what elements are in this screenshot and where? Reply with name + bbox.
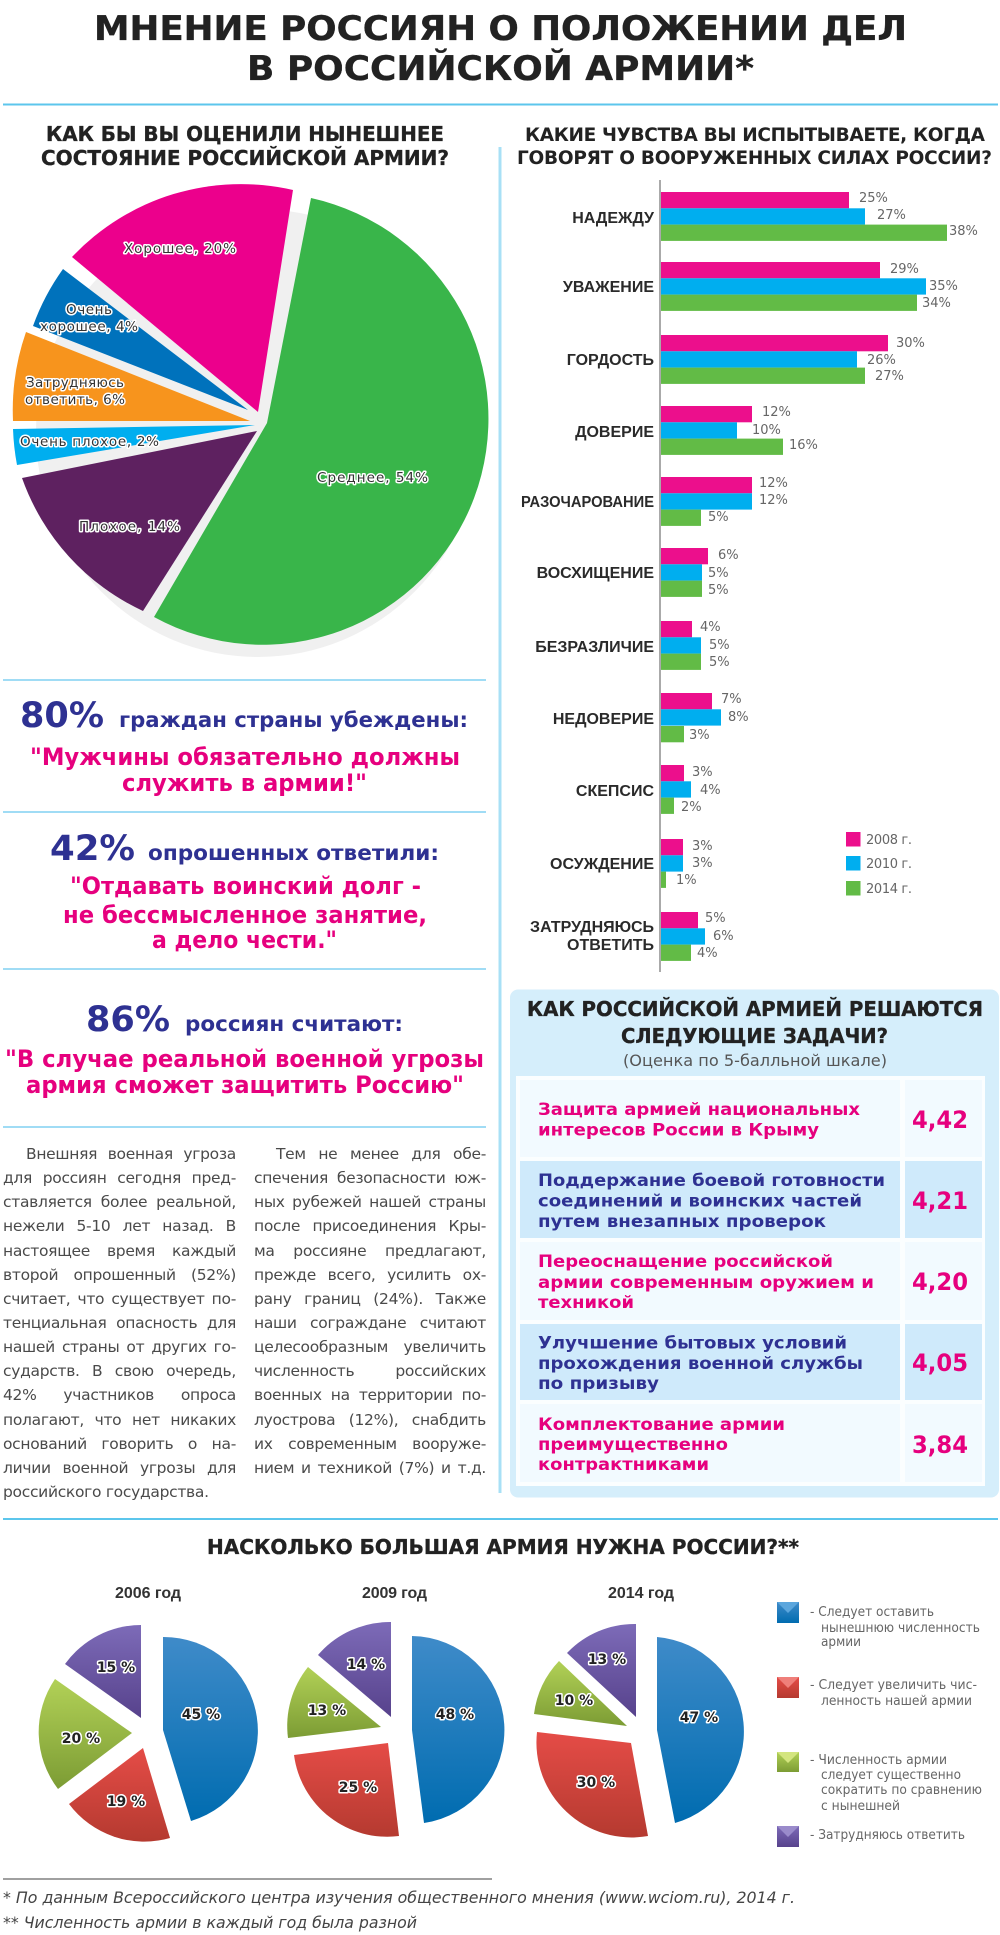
- panel: key quotes: [3, 679, 486, 1128]
- group: безразличие: БЕЗРАЗЛИЧИЕ: [535, 639, 654, 656]
- group: разочарование: 5%: [708, 510, 729, 525]
- pie labels: хорошее, 4%: [40, 319, 138, 335]
- row 1: [538, 1100, 968, 1140]
- text block: right column: ных рубежей нашей страны: [254, 1193, 486, 1211]
- row 4: 4,05: [912, 1349, 968, 1377]
- text block: left column: ставляется более реальной,: [3, 1193, 236, 1211]
- text block: right column: нием и техникой (7%) и т.д.: [254, 1459, 486, 1477]
- group: недоверие: 8%: [728, 710, 749, 725]
- stat: 42%: "Отдавать воинский долг -: [70, 872, 421, 900]
- group: осуждение: ОСУЖДЕНИЕ: [550, 856, 654, 873]
- text block: left column: российского государства.: [3, 1483, 209, 1501]
- row 2: соединений и воинских частей: [538, 1192, 862, 1212]
- text block: left column: сударств. В свою очередь,: [3, 1362, 236, 1380]
- row 1: интересов России в Крыму: [538, 1120, 819, 1140]
- slice: very good 4%: [33, 269, 248, 410]
- heading: army size question: НАСКОЛЬКО БОЛЬШАЯ АРМИЯ НУЖНА РОССИИ?**: [207, 1535, 800, 1559]
- bar chart axis: [659, 180, 661, 972]
- group: гордость: 30%: [896, 336, 925, 351]
- legend item: reduce: следует существенно: [821, 1768, 961, 1783]
- row 3: техникой: [538, 1293, 634, 1313]
- group: уважение: [563, 262, 958, 311]
- legend: years: 2010 г.: [866, 857, 912, 872]
- stat: 86%: 86%: [86, 1000, 170, 1040]
- group: гордость: 26%: [867, 353, 896, 368]
- row 2: Поддержание боевой готовности: [538, 1171, 885, 1191]
- pie: 2006: 20 %: [62, 1731, 100, 1747]
- row 2: 4,21: [912, 1187, 968, 1215]
- row 5: [538, 1415, 968, 1475]
- stat: 80%: служить в армии!": [122, 769, 367, 797]
- stat: 80%: [20, 696, 468, 797]
- group: недоверие: 3%: [689, 728, 710, 743]
- pie: 2006: 15 %: [97, 1660, 135, 1676]
- text block: left column: [3, 1145, 236, 1501]
- panel: tasks table: [510, 990, 999, 1498]
- text block: right column: наши сограждане считают: [254, 1314, 486, 1332]
- pie labels: Среднее, 54%: [317, 470, 428, 486]
- slice: undecided 6%: [13, 332, 250, 421]
- text block: left column: считает, что существует по-: [3, 1290, 236, 1308]
- heading: tasks question: СЛЕДУЮЩИЕ ЗАДАЧИ?: [621, 1024, 888, 1048]
- title: [94, 9, 907, 89]
- pie labels: Плохое, 14%: [79, 519, 180, 535]
- pie labels: Хорошее, 20%: [124, 241, 236, 257]
- text block: left column: второй опрошенный (52%): [3, 1266, 236, 1284]
- row 5: контрактниками: [538, 1455, 709, 1475]
- table background: [516, 1076, 985, 1486]
- text block: right column: [254, 1145, 486, 1477]
- group: гордость: 27%: [875, 369, 904, 384]
- stat: 86%: "В случае реальной военной угрозы: [5, 1045, 484, 1073]
- text block: right column: рану границ (24%). Также: [254, 1290, 486, 1308]
- pie: 2009: 13 %: [308, 1703, 346, 1719]
- legend item: reduce: - Численность армии: [810, 1753, 947, 1768]
- pie: 2014: 13 %: [588, 1652, 626, 1668]
- group: доверие: 10%: [752, 423, 781, 438]
- group: затрудняюсь ответить: ОТВЕТИТЬ: [567, 937, 654, 954]
- legend item: keep: армии: [821, 1635, 861, 1650]
- legend item: undecided: [777, 1826, 965, 1847]
- text block: left column: для россиян сегодня пред-: [3, 1169, 236, 1187]
- slice: good 20%: [72, 184, 293, 412]
- pie labels: Затрудняюсь: [26, 375, 124, 391]
- group: уважение: 34%: [922, 296, 951, 311]
- legend: years: 2008 г.: [866, 833, 912, 848]
- group: разочарование: [521, 476, 788, 526]
- group: скепсис: [576, 765, 721, 815]
- text block: right column: спечения безопасности юж-: [254, 1169, 486, 1187]
- legend: years: [846, 832, 912, 897]
- stat: 86%: [5, 1000, 484, 1099]
- pie: 2006: 45 %: [182, 1707, 220, 1723]
- pie: 2009: [287, 1585, 504, 1837]
- group: уважение: 35%: [929, 279, 958, 294]
- group: осуждение: [550, 839, 713, 888]
- group: недоверие: 7%: [721, 692, 742, 707]
- row 2: путем внезапных проверок: [538, 1212, 826, 1232]
- stat: 80%: 80%: [20, 696, 104, 736]
- heading: pie chart question: КАК БЫ ВЫ ОЦЕНИЛИ НЫНЕШНЕЕ: [46, 122, 444, 146]
- row 1: Защита армией национальных: [538, 1100, 860, 1120]
- slice: very bad 2%: [13, 425, 255, 465]
- group: осуждение: 3%: [692, 856, 713, 871]
- panel: current state of the army: [13, 122, 488, 657]
- row 3: 4,20: [912, 1268, 968, 1296]
- group: гордость: [567, 335, 925, 384]
- legend item: increase: - Следует увеличить чис-: [810, 1678, 977, 1693]
- group: разочарование: 12%: [759, 493, 788, 508]
- stat: 86%: армия сможет защитить Россию": [26, 1071, 464, 1099]
- footnotes: ** Численность армии в каждый год была разной: [3, 1913, 417, 1932]
- group: затрудняюсь ответить: 6%: [713, 929, 734, 944]
- group: затрудняюсь ответить: [530, 911, 734, 961]
- text block: left column: Внешняя военная угроза: [26, 1145, 236, 1163]
- text block: right column: численность российских: [254, 1362, 486, 1380]
- legend: army size: [777, 1602, 982, 1847]
- legend item: undecided: - Затрудняюсь ответить: [810, 1828, 965, 1843]
- group: недоверие: [553, 692, 749, 743]
- text block: right column: военных на территории по-: [254, 1386, 486, 1404]
- text block: right column: прежде всего, усилить ох-: [254, 1266, 486, 1284]
- row 5: Комплектование армии: [538, 1415, 785, 1435]
- pie: 2014: 30 %: [577, 1775, 615, 1791]
- group: затрудняюсь ответить: 5%: [705, 911, 726, 926]
- heading: tasks question: КАК РОССИЙСКОЙ АРМИЕЙ РЕШАЮТСЯ: [527, 997, 983, 1021]
- pie: 2006: 2006 год: [115, 1585, 181, 1602]
- group: доверие: 16%: [789, 438, 818, 453]
- pie: 2009: 25 %: [339, 1780, 377, 1796]
- footnotes: [3, 1888, 795, 1932]
- text block: right column: их современным вооруже-: [254, 1435, 486, 1453]
- pie chart: army state: [13, 184, 488, 657]
- group: безразличие: 4%: [700, 620, 721, 635]
- legend item: reduce: [777, 1752, 982, 1814]
- text block: left column: нашей страны от других го-: [3, 1338, 236, 1356]
- row 5: преимущественно: [538, 1435, 728, 1455]
- legend item: reduce: сократить по сравнению: [821, 1783, 982, 1798]
- group: затрудняюсь ответить: ЗАТРУДНЯЮСЬ: [530, 919, 654, 936]
- footnotes: * По данным Всероссийского центра изучения общественного мнения (www.wciom.ru), 2014 г.: [3, 1888, 795, 1907]
- row 2: [520, 1161, 982, 1238]
- heading: feelings question: [517, 125, 992, 169]
- text block: right column: целесообразным увеличить: [254, 1338, 486, 1356]
- group: затрудняюсь ответить: 4%: [697, 946, 718, 961]
- group: скепсис: 2%: [681, 800, 702, 815]
- group: гордость: ГОРДОСТЬ: [567, 352, 654, 369]
- pie: 2014: [534, 1585, 744, 1837]
- legend item: keep: - Следует оставить: [810, 1605, 934, 1620]
- pie: 2014: 2014 год: [608, 1585, 674, 1602]
- text block: left column: тенциальная опасность для: [3, 1314, 236, 1332]
- slice: bad 14%: [22, 431, 257, 611]
- group: доверие: 12%: [762, 405, 791, 420]
- pie labels: [20, 241, 428, 535]
- stat: 42%: а дело чести.": [152, 926, 337, 954]
- text block: right column: луострова (12%), снабдить: [254, 1411, 486, 1429]
- pie: 2014: 47 %: [680, 1710, 718, 1726]
- group: осуждение: 1%: [676, 873, 697, 888]
- heading: tasks question: [527, 997, 983, 1070]
- pie: 2009: 2009 год: [362, 1585, 427, 1602]
- group: восхищение: 5%: [708, 566, 729, 581]
- group: восхищение: 6%: [718, 548, 739, 563]
- slice: average 54%: [154, 198, 488, 645]
- legend item: keep: нынешнюю численность: [821, 1621, 980, 1636]
- group: надежду: 27%: [877, 208, 906, 223]
- legend item: reduce: с нынешней: [821, 1799, 900, 1814]
- group: восхищение: [537, 548, 739, 598]
- pie: 2009: 14 %: [347, 1657, 385, 1673]
- group: скепсис: 4%: [700, 783, 721, 798]
- group: скепсис: 3%: [692, 765, 713, 780]
- group: осуждение: 3%: [692, 839, 713, 854]
- row 3: [538, 1252, 968, 1313]
- legend item: keep: [777, 1602, 980, 1650]
- text block: left column: 42% участников опроса: [3, 1386, 236, 1404]
- stat: 42%: [50, 829, 439, 954]
- panel: feelings bar chart: [517, 125, 992, 972]
- group: надежду: НАДЕЖДУ: [572, 210, 655, 227]
- pie: 2009: 48 %: [436, 1707, 474, 1723]
- group: разочарование: 12%: [759, 476, 788, 491]
- group: уважение: УВАЖЕНИЕ: [563, 279, 654, 296]
- row 3: армии современным оружием и: [538, 1273, 874, 1293]
- row 5: 3,84: [912, 1431, 968, 1459]
- pie: 2006: [39, 1585, 258, 1842]
- text block: left column: нежели 5-10 лет назад. В: [3, 1217, 236, 1235]
- stat: 42%: опрошенных ответили:: [148, 841, 439, 865]
- group: надежду: 38%: [949, 224, 978, 239]
- group: надежду: 25%: [859, 191, 888, 206]
- group: доверие: ДОВЕРИЕ: [575, 424, 654, 441]
- row 4: по призыву: [538, 1374, 659, 1394]
- title: В РОССИЙСКОЙ АРМИИ*: [247, 48, 754, 89]
- row 3: Переоснащение российской: [538, 1252, 833, 1272]
- row 1: 4,42: [912, 1106, 968, 1134]
- group: безразличие: 5%: [709, 638, 730, 653]
- text block: left column: личии военной угрозы для: [3, 1459, 236, 1477]
- text block: left column: настоящее время каждый: [3, 1242, 236, 1260]
- group: безразличие: [535, 620, 730, 670]
- legend item: increase: ленность нашей армии: [821, 1694, 972, 1709]
- group: восхищение: ВОСХИЩЕНИЕ: [537, 565, 654, 582]
- group: скепсис: СКЕПСИС: [576, 783, 654, 800]
- pie: 2014: 10 %: [555, 1693, 593, 1709]
- text block: left column: оснований говорить о на-: [3, 1435, 236, 1453]
- pie: 2006: 19 %: [107, 1794, 145, 1810]
- row 4: Улучшение бытовых условий: [538, 1334, 847, 1354]
- stat: 80%: граждан страны убеждены:: [119, 708, 468, 732]
- group: восхищение: 5%: [708, 583, 729, 598]
- row 4: [520, 1324, 982, 1400]
- legend item: increase: [777, 1677, 977, 1709]
- text block: right column: ма россияне предлагают,: [254, 1242, 486, 1260]
- stat: 42%: 42%: [50, 829, 135, 869]
- pie labels: Очень: [66, 302, 112, 318]
- group: уважение: 29%: [890, 262, 919, 277]
- heading: pie chart question: СОСТОЯНИЕ РОССИЙСКОЙ АРМИИ?: [41, 146, 449, 170]
- text block: right column: после присоединения Кры-: [254, 1217, 486, 1235]
- heading: feelings question: КАКИЕ ЧУВСТВА ВЫ ИСПЫТЫВАЕТЕ, КОГДА: [525, 125, 986, 146]
- group: доверие: [575, 405, 818, 455]
- stat: 86%: россиян считают:: [185, 1012, 403, 1036]
- legend: years: 2014 г.: [866, 882, 912, 897]
- group: безразличие: 5%: [709, 655, 730, 670]
- stat: 42%: не бессмысленное занятие,: [63, 901, 427, 929]
- row 4: прохождения военной службы: [538, 1354, 863, 1374]
- stat: 80%: "Мужчины обязательно должны: [30, 743, 460, 771]
- heading: tasks question: (Оценка по 5-балльной шкале): [623, 1051, 887, 1070]
- group: надежду: [572, 191, 978, 241]
- text block: right column: Тем не менее для обе-: [276, 1145, 486, 1163]
- pie labels: ответить, 6%: [25, 392, 125, 408]
- heading: pie chart question: [41, 122, 449, 170]
- heading: feelings question: ГОВОРЯТ О ВООРУЖЕННЫХ СИЛАХ РОССИИ?: [517, 148, 992, 169]
- pie labels: Очень плохое, 2%: [20, 434, 159, 450]
- title: МНЕНИЕ РОССИЯН О ПОЛОЖЕНИИ ДЕЛ: [94, 9, 907, 49]
- text block: left column: полагают, что нет никаких: [3, 1411, 236, 1429]
- group: недоверие: НЕДОВЕРИЕ: [553, 711, 654, 728]
- group: разочарование: РАЗОЧАРОВАНИЕ: [521, 494, 654, 511]
- panel: army size pies: [39, 1535, 982, 1847]
